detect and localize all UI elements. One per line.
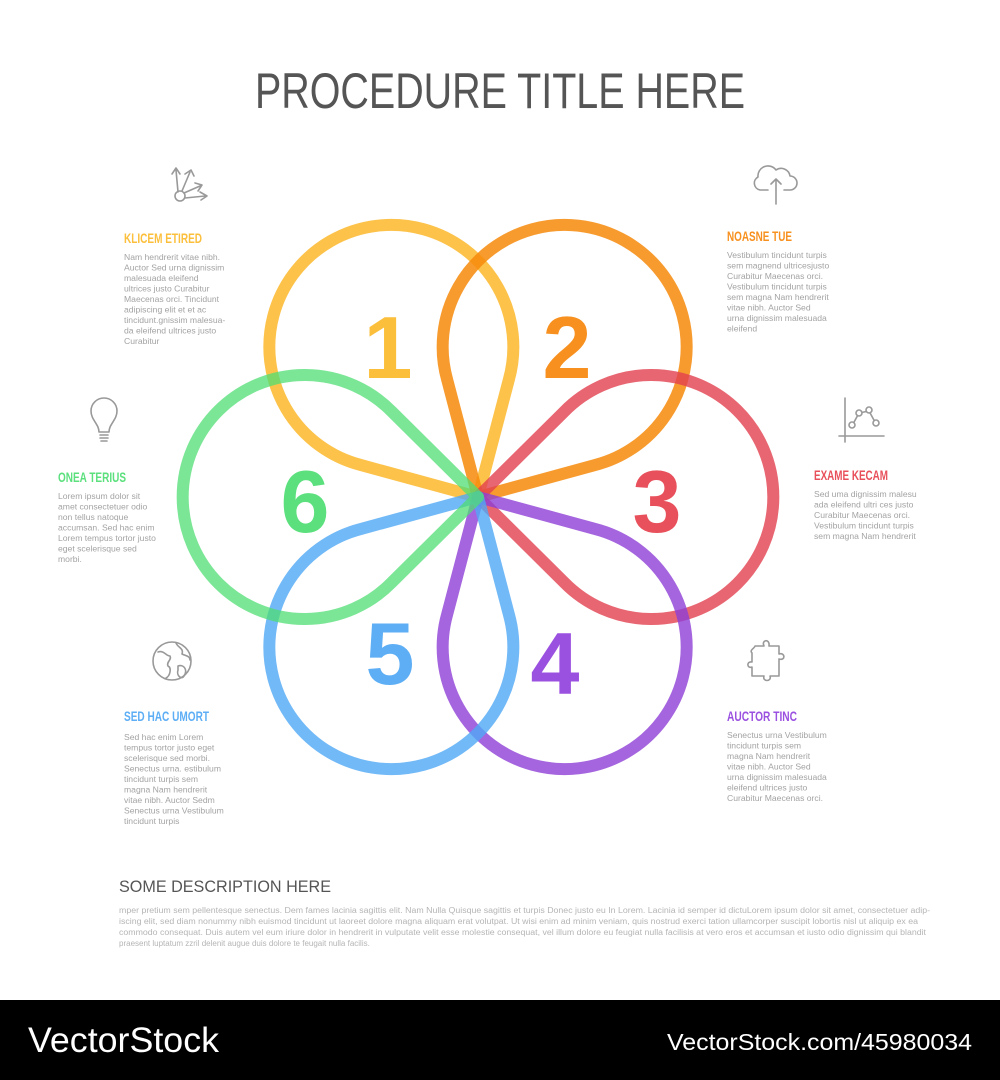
numbers: 1 [364,298,412,397]
text: Maecenas orci. Tincidunt [124,294,220,304]
heading: ONEA TERIUS [58,469,126,485]
text: ada eleifend ultri ces justo [814,500,914,510]
description text: mper pretium sem pellentesque senectus. Dem fames lacinia sagittis elit. Nam Nulla Quisque sagittis et turpis Donec justo eu In Lorem. Lacinia id semper id dictuLorem ipsum dolor sit amet, consectetuer adip- [119,906,930,915]
block 4 [727,641,827,803]
text: Lorem ipsum dolor sit [58,491,141,501]
heading: EXAME KECAM [814,467,888,483]
heading: KLICEM ETIRED [124,230,202,246]
petal 4 [372,436,731,814]
description text: commodo consequat. Duis autem vel eum iriure dolor in hendrerit in vulputate velit esse molestie consequat, vel illum dolore eu feugiat nulla facilisis at vero eros et accumsan et iusto odio dignissim qui blandit [119,928,927,937]
text: Senectus urna. estibulum [124,764,221,774]
icon: cloud upload [754,166,797,204]
text: urna dignissim malesuada [727,313,827,323]
description text: praesent luptatum zzril delenit augue duis dolore te feugait nulla facilis. [119,939,370,948]
text: tempus tortor justo eget [124,742,215,752]
description heading: SOME DESCRIPTION HERE [119,877,331,896]
icon: light bulb [91,398,117,441]
text: eleifend [727,324,757,334]
text: vitae nibh. Auctor Sedm [124,795,215,805]
text: Curabitur Maecenas orci. [814,510,910,520]
text: sem magnend ultricesjusto [727,260,829,270]
text: tincidunt.gnissim malesua- [124,315,225,325]
text: non tellus natoque [58,512,128,522]
block 5 [124,642,224,826]
text: Vestibulum tincidunt turpis [814,520,914,530]
block 2 [727,166,829,334]
numbers [281,298,681,713]
icon: line chart [839,398,884,442]
description text: iscing elit, sed diam nonummy nibh euismod tincidunt ut laoreet dolore magna aliquam erat volutpat. Ut wisi enim ad minim veniam, quis nostrud exerci tation ullamcorper suscipit lobortis nisl ut aliquip ex ea [119,917,919,926]
petal 2 [372,180,731,558]
text: ultrices justo Curabitur [124,284,210,294]
title: PROCEDURE TITLE HERE [255,63,745,119]
text: Senectus urna Vestibulum [727,730,827,740]
text: accumsan. Sed hac enim [58,522,154,532]
text: tincidunt turpis sem [727,740,801,750]
flower diagram [183,180,773,814]
text: urna dignissim malesuada [727,772,827,782]
text: Lorem tempus tortor justo [58,533,156,543]
text: sem magna Nam hendrerit [727,292,829,302]
text: da eleifend ultrices justo [124,326,216,336]
text: eget scelerisque sed [58,544,137,554]
text: eleifend ultrices justo [727,782,807,792]
text: Curabitur Maecenas orci. [727,271,823,281]
text: amet consectetuer odio [58,502,148,512]
petal 5 [225,436,584,814]
text: tincidunt turpis [124,816,179,826]
petal 3 [478,375,773,619]
text: Vestibulum tincidunt turpis [727,250,827,260]
text: Nam hendrerit vitae nibh. [124,252,220,262]
heading: NOASNE TUE [727,228,792,244]
petal 1 [225,180,584,558]
text: vitae nibh. Auctor Sed [727,762,811,772]
numbers: 4 [531,614,580,713]
icon: arrows [172,168,207,201]
text: sem magna Nam hendrerit [814,531,916,541]
block 6 [58,398,156,564]
text: scelerisque sed morbi. [124,753,210,763]
footer logo: VectorStock [28,1021,220,1060]
block 1 [124,168,225,346]
numbers: 3 [633,452,681,551]
text: magna Nam hendrerit [124,784,208,794]
block 3 [814,398,917,541]
description [119,877,930,948]
text: Sed hac enim Lorem [124,732,203,742]
text: magna Nam hendrerit [727,751,811,761]
heading: AUCTOR TINC [727,708,797,724]
text: malesuada eleifend [124,273,199,283]
text: vitae nibh. Auctor Sed [727,302,811,312]
footer url: VectorStock.com/45980034 [667,1029,972,1055]
text: adipiscing elit et et ac [124,304,207,314]
text: Curabitur Maecenas orci. [727,793,823,803]
text: Senectus urna Vestibulum [124,806,224,816]
text: Vestibulum tincidunt turpis [727,282,827,292]
text: Auctor Sed urna dignissim [124,262,224,272]
numbers: 5 [366,604,414,703]
footer bar [0,1000,1000,1080]
heading: SED HAC UMORT [124,708,209,724]
numbers: 6 [281,452,329,551]
petal 6 [183,375,478,619]
numbers: 2 [543,298,591,397]
text: Sed uma dignissim malesu [814,489,917,499]
text: morbi. [58,554,82,564]
text: tincidunt turpis sem [124,774,198,784]
icon: puzzle [748,641,784,680]
icon: globe [153,642,191,680]
text: Curabitur [124,336,159,346]
